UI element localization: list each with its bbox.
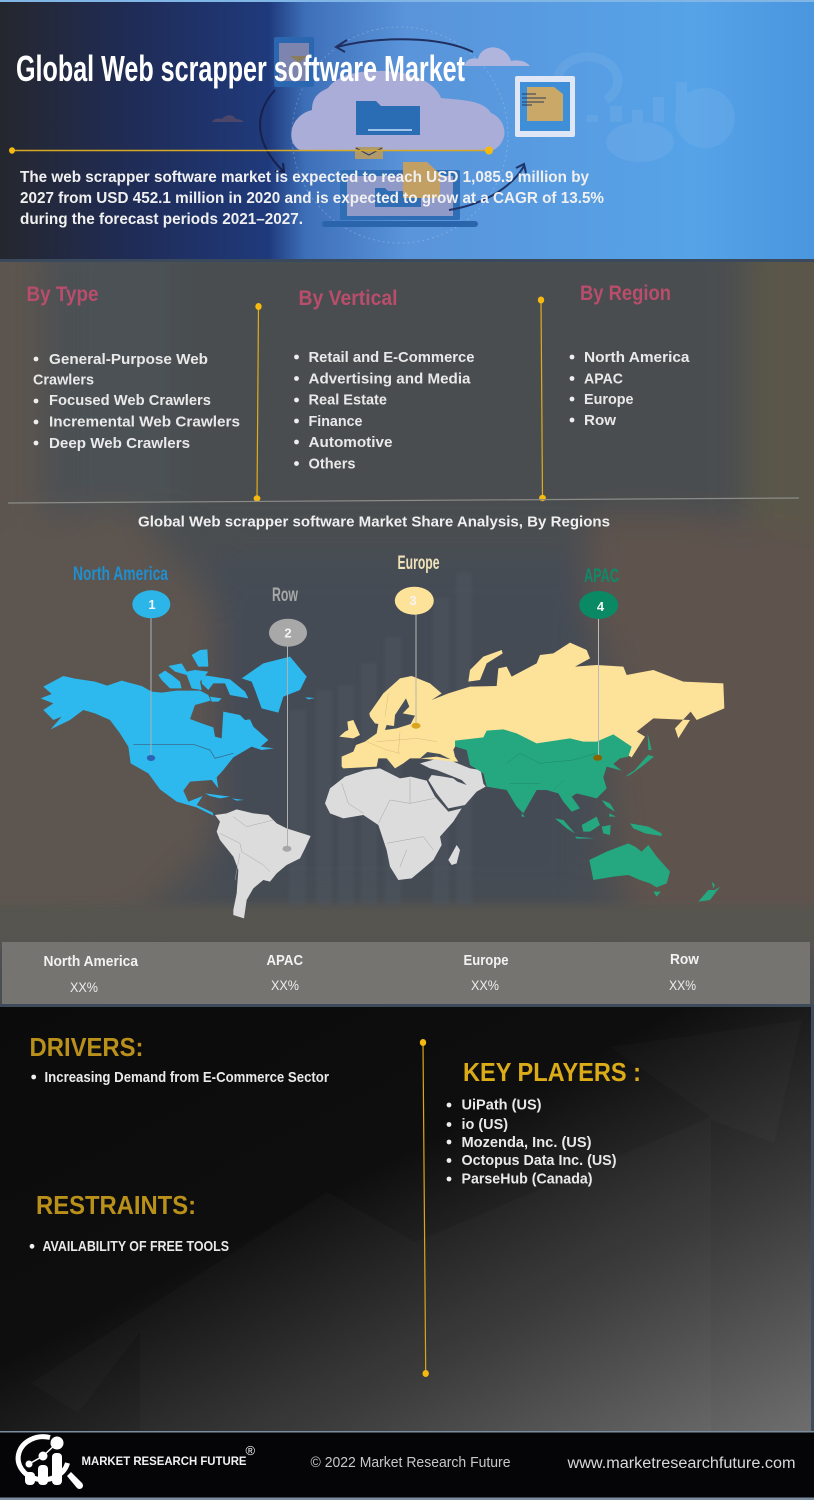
arrow: lower right curved [449,164,526,210]
icon: laptop with folder [322,162,478,227]
list: By Type: Focused Web Crawlers [49,392,211,409]
faded bar chart background [289,572,472,905]
arrow: left curved [260,90,284,172]
heading: map section title: Global Web scrapper software Market Share Analysis, By Regions [138,514,610,530]
map region: Eurasia (Europe and Russia) [339,643,724,768]
table: regional shares: XX% [271,977,299,993]
panel: drivers, restraints and key players [0,1007,814,1432]
icon: phone with envelope [274,37,314,87]
icon: dotted orbit circle [292,27,508,243]
icon: folder [356,101,420,135]
faded rising arrow background [31,1020,802,1432]
map: world regions [41,643,724,918]
Greenland [242,657,307,713]
divider: gold vertical line two [538,296,546,501]
leader line and pin: APAC: 4 [597,599,605,614]
table: regional shares: XX% [669,977,696,993]
list: drivers: Increasing Demand from E-Commerce Sector [44,1069,329,1086]
icon: faint charts at right [558,57,735,162]
list: By Region: Row [584,412,616,429]
list: By Vertical: Others [308,456,356,472]
list: By Region: North America [584,349,690,366]
list: By Vertical: Automotive [308,434,392,451]
list: By Vertical: Real Estate [308,392,387,408]
heading: By Type: By Type [26,283,98,306]
list: By Vertical [294,349,474,472]
divider: gold line with dots [9,146,493,154]
label: APAC: APAC [584,566,619,587]
list: key players: UiPath (US) [462,1096,542,1114]
icon: logo magnifier [18,1436,83,1489]
leader line and pin: Europe: 3 [409,593,417,608]
arrow: top curved [336,39,473,52]
panel: header banner [0,0,814,262]
website: www.marketresearchfuture.com [566,1455,796,1472]
brand name: MARKET RESEARCH FUTURE [82,1456,247,1468]
list: key players: Mozenda, Inc. (US) [462,1134,592,1151]
list: By Type: General-Purpose Web [49,351,208,368]
list: By Vertical: Retail and E-Commerce [308,349,474,366]
registered mark: ® [246,1443,256,1458]
heading: Drivers: DRIVERS: [30,1032,144,1062]
copyright: © 2022 Market Research Future [310,1454,510,1471]
list: By Region [570,349,690,429]
leader line and pin: North America: 1 [148,597,156,612]
leader line and pin: APAC [579,591,618,761]
icon: tablet with document [515,76,575,137]
icon: envelope [355,147,383,159]
list: key players: ParseHub (Canada) [462,1170,592,1188]
map region: APAC [455,729,720,902]
leader line and pin: North America [132,590,170,761]
divider: gold vertical line one [254,303,262,502]
table: regional shares: APAC [266,953,303,969]
list: By Vertical: Advertising and Media [308,370,471,388]
table: regional shares: Europe [464,953,508,969]
map region: Africa and Middle East [325,759,486,880]
table: regional shares: XX% [70,979,98,995]
text block: market summary [20,169,604,228]
seas [385,698,468,763]
label: North America: North America [73,564,168,585]
list: By Type: Deep Web Crawlers [49,435,190,452]
list: restraints: AVAILABILITY OF FREE TOOLS [42,1238,229,1255]
divider: gold vertical line three [420,1039,429,1377]
table: regional shares [0,942,814,1007]
list: By Region: APAC [584,370,623,388]
table: regional shares: XX% [471,977,499,993]
heading: By Vertical: By Vertical [298,287,398,310]
heading: By Region: By Region [580,282,671,305]
map region: North America [41,649,315,816]
list: key players: Octopus Data Inc. (US) [462,1152,616,1169]
icon: faint dusty cloud [212,115,244,122]
panel: segmentation and map background [0,230,814,1005]
icon: small cloud [465,47,530,66]
table: regional shares: North America [44,954,139,970]
map region: South America [215,809,311,918]
heading: Restraints: RESTRAINTS: [36,1190,196,1220]
leader line and pin: Row: 2 [284,626,292,640]
icon: large cloud [291,71,504,150]
list: By Type [33,351,240,452]
title: Global Web scrapper software Market [16,48,465,89]
list: By Type: Crawlers [33,372,94,388]
list: key players: io (US) [462,1116,508,1133]
table: regional shares: Row [670,952,700,968]
list: key players [447,1096,616,1188]
list: By Region: Europe [584,391,634,408]
leader line and pin: Europe [395,587,434,729]
label: Europe: Europe [398,553,440,574]
footer [0,1431,814,1500]
list: By Vertical: Finance [308,413,362,430]
heading: Key Players: KEY PLAYERS : [463,1057,641,1087]
text block: market summary: during the forecast periods 2021–2027. [20,211,303,228]
text block: market summary: 2027 from USD 452.1 million in 2020 and is expected to grow at a CAGR of 13.5% [20,190,604,207]
leader line and pin: Row [269,619,307,852]
text block: market summary: The web scrapper software market is expected to reach USD 1,085.9 million by [20,169,589,186]
label: Row: Row [272,585,298,606]
list: By Type: Incremental Web Crawlers [49,414,240,430]
bottom brown band [96,905,814,942]
